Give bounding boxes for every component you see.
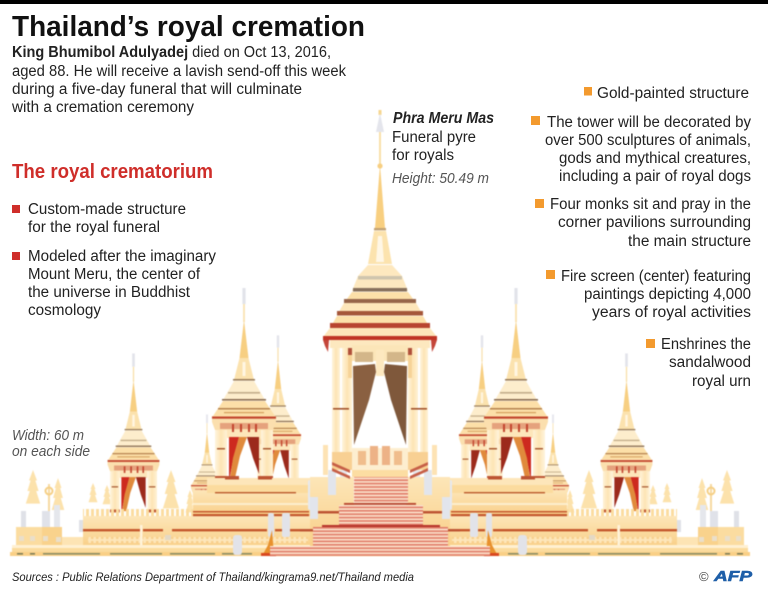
note: royal urn: sandalwood (669, 354, 751, 371)
small garden spires (21, 470, 194, 532)
source line: Sources : Public Relations Department of Thailand/kingrama9.net/Thailand media (12, 570, 414, 584)
upper terrace (207, 476, 319, 493)
label: Phra Meru Mas: for royals (392, 147, 454, 164)
spire (368, 163, 392, 264)
intro text: King Bhumibol Adulyadej died on Oct 13, 2016, (12, 44, 331, 61)
AFP credit: © (699, 569, 709, 584)
note: royal urn (646, 336, 751, 390)
label: Phra Meru Mas: Funeral pyre (392, 129, 476, 146)
bullet: Mount Meru: Mount Meru, the center of (28, 266, 201, 283)
note: four monks (535, 196, 751, 250)
note: sculptures: over 500 sculptures of animals, (545, 132, 751, 149)
opening and curtains (353, 350, 407, 445)
note: fire screen: paintings depicting 4,000 (584, 286, 751, 303)
note: four monks: the main structure (628, 233, 751, 250)
large side pavilion (212, 288, 276, 480)
note: four monks: Four monks sit and pray in the (550, 196, 751, 213)
middle terrace (193, 490, 340, 516)
bullet: custom-made structure: Custom-made structure (28, 201, 186, 218)
AFP credit (699, 568, 753, 585)
lower terrace (83, 509, 341, 547)
label: width (12, 427, 90, 460)
illustration: left half of the crematorium (10, 288, 380, 556)
outer low buildings (16, 527, 84, 547)
rear side pavilion (255, 335, 301, 483)
intro text: during a five-day funeral that will culminate (12, 81, 302, 98)
intro text: aged 88. He will receive a lavish send-off this week (12, 63, 346, 80)
title: Thailand’s royal cremation (12, 11, 365, 43)
note: sculptures: gods and mythical creatures, (559, 150, 751, 167)
ground base (10, 545, 380, 556)
small spire pavilion behind terrace (191, 414, 223, 520)
label: Phra Meru Mas: Height: 50.49 m (392, 170, 489, 187)
fire screen (352, 446, 408, 477)
central tower: Phra Meru Mas (270, 110, 490, 556)
AFP credit: AFP (713, 568, 753, 585)
spire finial (376, 110, 384, 165)
intro text (11, 44, 346, 116)
bullet: Mount Meru: the universe in Buddhist (28, 284, 191, 301)
heading: the royal crematorium: The royal crematorium (12, 161, 213, 183)
guardian statues (233, 466, 347, 555)
tiered roof (323, 265, 437, 352)
frame and columns (323, 340, 437, 475)
label: width: on each side (12, 443, 90, 460)
bullet: custom-made structure: for the royal funeral (28, 219, 160, 236)
top black bar (0, 0, 768, 4)
note: sculptures (531, 114, 751, 185)
note: fire screen: years of royal activities (592, 304, 751, 321)
bullet: Mount Meru: cosmology (28, 302, 101, 319)
note: fire screen (546, 268, 751, 321)
note: fire screen: Fire screen (center) featuring (561, 268, 751, 285)
note: four monks: corner pavilions surrounding (558, 214, 751, 231)
legend: gold-painted structure: Gold-painted structure (597, 85, 749, 102)
note: sculptures: including a pair of royal dogs (559, 168, 751, 185)
label: Phra Meru Mas (392, 110, 494, 187)
bullet: custom-made structure (12, 201, 186, 236)
outer corner pavilion (108, 353, 159, 513)
bullet: Mount Meru (12, 248, 216, 319)
illustration: right half (mirror) (380, 288, 750, 556)
bullet: Mount Meru: Modeled after the imaginary (28, 248, 216, 265)
note: sculptures: The tower will be decorated by (547, 114, 751, 131)
note: royal urn: royal urn (692, 373, 751, 390)
stair side blocks (261, 470, 354, 556)
intro text: with a cremation ceremony (11, 99, 194, 116)
balustrades (332, 462, 428, 479)
note: royal urn: Enshrines the (661, 336, 751, 353)
label: width: Width: 60 m (12, 427, 84, 444)
central staircase (270, 477, 490, 556)
label: Phra Meru Mas: Phra Meru Mas (393, 110, 494, 127)
